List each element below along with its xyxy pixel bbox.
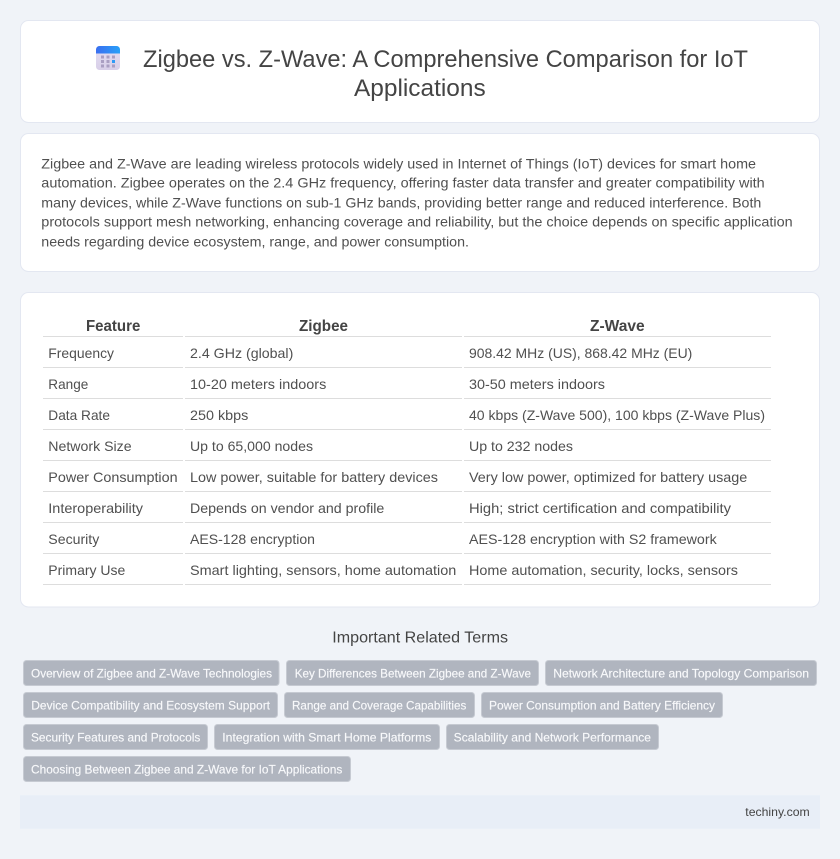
footer [20, 795, 820, 829]
table header row: Zigbee [299, 318, 348, 335]
tag: device compatibility [24, 692, 278, 718]
row: data rate: Data Rate [48, 407, 110, 423]
row: security: AES-128 encryption [190, 531, 315, 547]
tag: overview: Overview of Zigbee and Z-Wave Technologies [31, 666, 272, 680]
tag: network architecture [546, 660, 816, 686]
row: range [48, 376, 605, 392]
row: network size: Network Size [48, 438, 132, 454]
footer credit: techiny.com [745, 805, 810, 819]
tag: network architecture: Network Architecture and Topology Comparison [553, 666, 809, 680]
row: range: 30-50 meters indoors [469, 376, 605, 392]
tag: scalability [446, 724, 658, 750]
row: power consumption: Low power, suitable for battery devices [190, 469, 438, 485]
title [143, 46, 748, 102]
text block: introduction paragraph: many devices, while Z-Wave functions on sub-1 GHz bands, providing better range and reduced interference. Both [41, 194, 761, 210]
panel: introduction [20, 134, 820, 272]
text block: introduction paragraph [41, 155, 793, 249]
title: Applications [354, 75, 486, 102]
row: data rate: 40 kbps (Z-Wave 500), 100 kbps (Z-Wave Plus) [469, 407, 765, 423]
row: frequency [48, 345, 692, 361]
text block: introduction paragraph: protocols support mesh networking, enhancing coverage and reliability, but the choice depends on specific application [41, 214, 793, 230]
text block: introduction paragraph: Zigbee and Z-Wave are leading wireless protocols widely used in Internet of Things (IoT) devices for smart home [41, 155, 756, 171]
table header row: Feature [86, 318, 140, 335]
tag: security features: Security Features and Protocols [31, 730, 200, 744]
tag: overview [24, 660, 279, 686]
row: frequency: Frequency [48, 345, 114, 361]
row: interoperability: High; strict certification and compatibility [469, 500, 731, 516]
table header row [86, 318, 645, 335]
row: power consumption: Power Consumption [48, 469, 178, 485]
text block: introduction paragraph: automation. Zigbee operates on the 2.4 GHz frequency, offering faster data transfer and greater compatibility with [41, 175, 765, 191]
row: network size: Up to 232 nodes [469, 438, 573, 454]
tag: security features [24, 724, 208, 750]
row: primary use [48, 562, 738, 578]
tag: power consumption [482, 692, 722, 718]
row: primary use: Home automation, security, locks, sensors [469, 562, 738, 578]
row: power consumption: Very low power, optimized for battery usage [469, 469, 748, 485]
row: security: Security [48, 531, 99, 547]
row: range: 10-20 meters indoors [190, 376, 326, 392]
panel: header [20, 20, 820, 122]
panel: related terms [24, 630, 816, 782]
row: interoperability [48, 500, 731, 516]
tag: choosing between [24, 756, 350, 782]
row: security: AES-128 encryption with S2 framework [469, 531, 718, 547]
tag: device compatibility: Device Compatibility and Ecosystem Support [31, 698, 271, 712]
row: interoperability: Depends on vendor and profile [190, 500, 385, 516]
row: network size: Up to 65,000 nodes [190, 438, 313, 454]
row: data rate [48, 407, 765, 423]
tag: choosing between: Choosing Between Zigbee and Z-Wave for IoT Applications [31, 762, 342, 776]
row: data rate: 250 kbps [190, 407, 248, 423]
panel: comparison table [20, 292, 820, 607]
row: power consumption [48, 469, 748, 485]
tag: key differences [286, 660, 538, 686]
tag: range and coverage [284, 692, 474, 718]
row: interoperability: Interoperability [48, 500, 143, 516]
title: Zigbee vs. Z-Wave: A Comprehensive Comparison for IoT [143, 46, 748, 73]
tag: smart home integration: Integration with Smart Home Platforms [222, 730, 431, 744]
row: security [48, 531, 718, 547]
text block: introduction paragraph: needs regarding device ecosystem, range, and power consumption. [41, 233, 469, 249]
tag: scalability: Scalability and Network Performance [454, 730, 651, 744]
icon: calendar [96, 46, 120, 70]
row: frequency: 2.4 GHz (global) [190, 345, 293, 361]
row: range: Range [48, 376, 88, 392]
row: frequency: 908.42 MHz (US), 868.42 MHz (EU) [469, 345, 692, 361]
tag: key differences: Key Differences Between Zigbee and Z-Wave [295, 666, 531, 680]
tag: power consumption: Power Consumption and Battery Efficiency [489, 698, 715, 712]
row: primary use: Primary Use [48, 562, 126, 578]
heading: important related terms: Important Related Terms [332, 630, 508, 647]
table header row: Z-Wave [590, 318, 645, 335]
tag: smart home integration [214, 724, 440, 750]
row: network size [48, 438, 573, 454]
tag: range and coverage: Range and Coverage Capabilities [292, 698, 466, 712]
row: primary use: Smart lighting, sensors, home automation [190, 562, 456, 578]
